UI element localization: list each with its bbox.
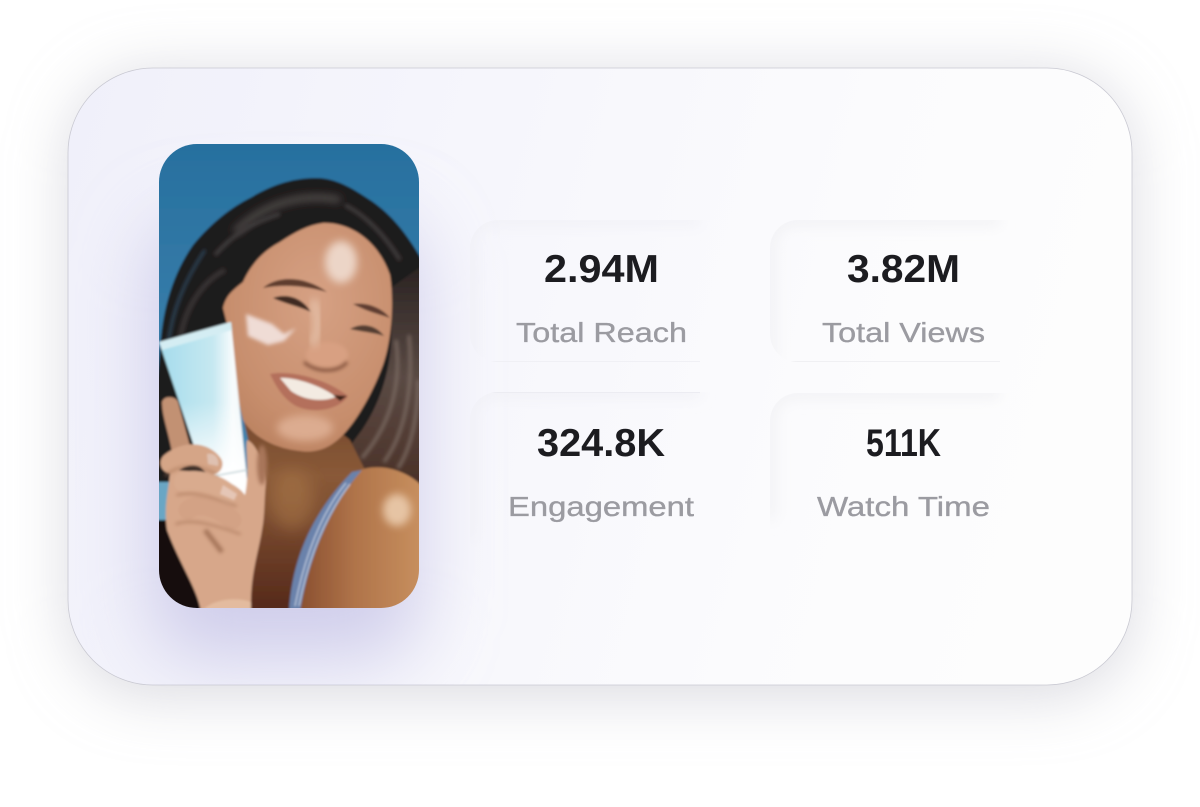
cream streak [246, 314, 296, 345]
index finger behind tube [162, 397, 190, 452]
palm shading [205, 530, 222, 552]
neck highlight [270, 470, 314, 530]
eyes [273, 296, 311, 312]
stat: engagement: Engagement [508, 491, 694, 522]
face [223, 223, 392, 452]
chest and neck [243, 422, 365, 608]
stat card backgrounds [492, 361, 1000, 393]
stat: total reach [516, 248, 687, 348]
hand palm [166, 440, 266, 612]
swimsuit strap [289, 470, 362, 612]
card drop shadow [68, 72, 1132, 697]
stat: watch time [817, 422, 990, 522]
fingernails [207, 454, 218, 466]
photo sky [155, 140, 423, 612]
eyebrows [263, 279, 327, 292]
stat: watch time: 511K [866, 422, 941, 465]
chin highlight [277, 415, 333, 441]
hair strands on the left temple [180, 270, 225, 340]
main card panel [68, 68, 1132, 685]
nose [310, 348, 346, 366]
hair [159, 176, 419, 484]
shoulder [300, 467, 423, 612]
forehead highlight [325, 241, 357, 283]
wrist highlight [204, 599, 252, 608]
stat: watch time: Watch Time [817, 491, 990, 522]
stat: total reach: Total Reach [516, 317, 687, 348]
light sky patch and lower left hair [159, 480, 170, 522]
tube [160, 329, 246, 470]
stat: total reach: 2.94M [544, 248, 659, 291]
stat: total views: Total Views [822, 317, 985, 348]
fingers [166, 455, 240, 534]
stat: engagement: 324.8K [537, 422, 665, 465]
stat: engagement [508, 422, 694, 522]
photo: woman holding sunscreen tube [155, 140, 423, 612]
stat: total views: 3.82M [847, 248, 960, 291]
stat: total views [822, 248, 985, 348]
smile [270, 373, 348, 410]
hair lock behind neck [352, 268, 419, 483]
